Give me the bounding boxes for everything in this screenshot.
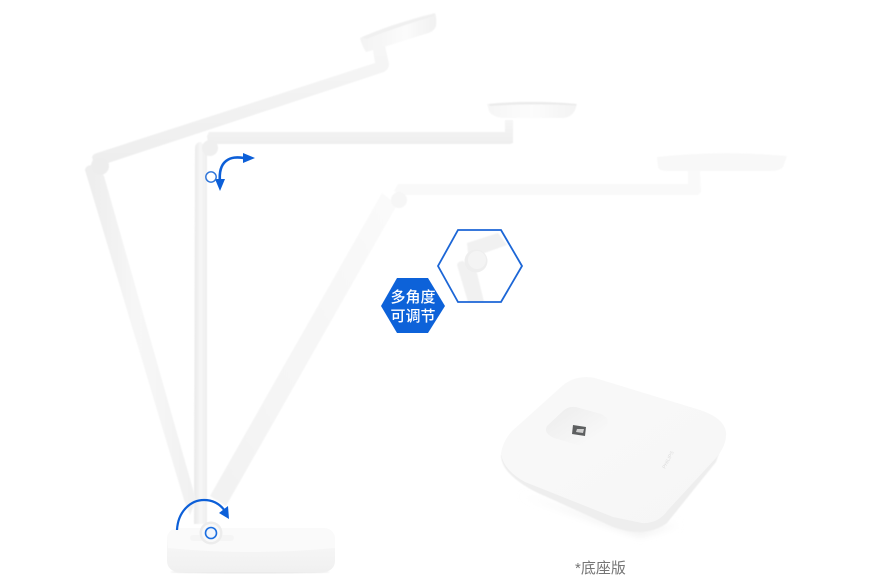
arrow: base rotation <box>177 500 229 530</box>
pivot knob <box>200 522 222 544</box>
shadow <box>520 495 680 536</box>
base plate product photo <box>501 377 726 536</box>
blue ring on arm joint <box>206 172 216 182</box>
lamp position 2: upright arm <box>194 102 577 524</box>
lower arm detail <box>457 261 484 302</box>
lamp position 1: raised arm <box>85 13 436 515</box>
recessed well <box>546 407 608 446</box>
lamp position 3: lowered arm <box>210 153 787 506</box>
lower arm <box>210 193 397 506</box>
lamp head <box>360 13 436 52</box>
arrow: arm tilt <box>215 153 255 191</box>
badge: adjustable at multiple angles: 可调节 <box>390 308 436 325</box>
joint <box>202 140 218 156</box>
hexagon detail: arm joint close-up <box>438 230 522 302</box>
joint detail <box>464 250 488 272</box>
hexagon outline <box>438 230 522 302</box>
upper arm <box>92 46 389 166</box>
badge: adjustable at multiple angles <box>381 278 445 333</box>
lower arm <box>194 142 207 524</box>
blue pivot ring <box>206 528 216 538</box>
joint <box>91 157 109 175</box>
upper arm <box>207 120 513 144</box>
upper arm <box>394 171 701 195</box>
connector port <box>572 425 586 436</box>
lamp head <box>487 102 577 118</box>
caption: *底座版 <box>575 560 626 577</box>
upper arm detail <box>467 233 507 256</box>
badge: adjustable at multiple angles: 多角度 <box>390 289 436 306</box>
brand mark: PHILIPS <box>661 450 676 470</box>
joint <box>391 192 407 208</box>
desk lamp base <box>167 522 335 574</box>
plate edge <box>501 430 722 532</box>
slot <box>190 535 234 541</box>
plate top <box>501 377 726 523</box>
lamp head <box>657 153 787 171</box>
lower arm <box>85 165 196 515</box>
base body <box>167 528 335 572</box>
